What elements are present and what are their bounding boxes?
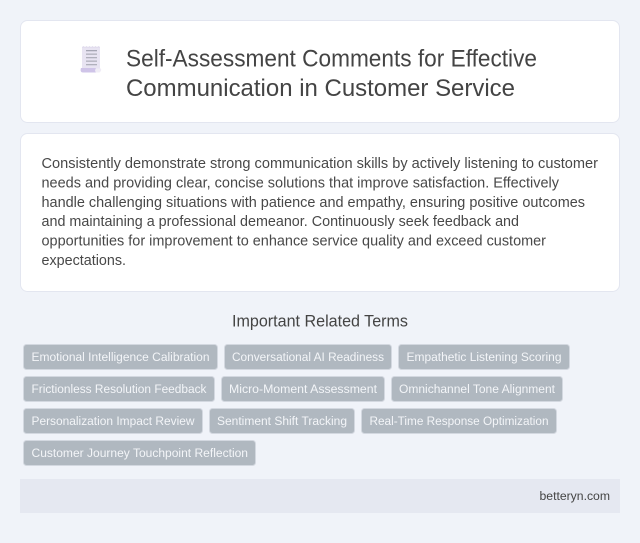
tag — [222, 376, 384, 402]
tag — [392, 376, 562, 402]
heading: related terms: Important Related Terms — [232, 312, 408, 330]
tag: Micro-Moment Assessment — [229, 382, 378, 396]
tag — [24, 344, 218, 370]
text block: self-assessment paragraph: opportunities for improvement to enhance service quality and exceed customer — [42, 234, 546, 250]
tag: Real-Time Response Optimization — [370, 414, 549, 428]
tag: Omnichannel Tone Alignment — [399, 382, 556, 396]
tag — [398, 344, 570, 370]
tag: Frictionless Resolution Feedback — [32, 382, 207, 396]
tag — [362, 408, 556, 434]
tag: Personalization Impact Review — [32, 414, 195, 428]
tag — [224, 344, 392, 370]
text block: self-assessment paragraph: and maintaining a professional demeanor. Continuously seek feedback and — [42, 214, 519, 230]
tag: Emotional Intelligence Calibration — [32, 350, 210, 364]
text block: self-assessment paragraph — [42, 156, 598, 269]
footer — [20, 479, 620, 513]
text block: self-assessment paragraph: Consistently demonstrate strong communication skills by actively listening to customer — [42, 156, 598, 172]
tag: Conversational AI Readiness — [232, 350, 384, 364]
footer source text: betteryn.com — [540, 489, 610, 503]
tag: Customer Journey Touchpoint Reflection — [32, 446, 248, 460]
text block: self-assessment paragraph: handle challenging situations with patience and empathy, ensuring positive outcomes — [42, 195, 585, 211]
tag: Sentiment Shift Tracking — [217, 414, 347, 428]
panel: summary text — [20, 134, 620, 292]
tag — [24, 376, 214, 402]
tag — [24, 440, 256, 466]
tag: Empathetic Listening Scoring — [406, 350, 562, 364]
panel: header — [20, 20, 620, 122]
text block: self-assessment paragraph: expectations. — [42, 253, 126, 269]
title — [126, 46, 537, 102]
tag list — [24, 344, 570, 466]
tag — [210, 408, 354, 434]
icon: document — [81, 46, 101, 72]
tag — [24, 408, 202, 434]
title: Self-Assessment Comments for Effective — [126, 46, 537, 72]
text block: self-assessment paragraph: needs and providing clear, concise solutions that improve satisfaction. Effectively — [42, 175, 560, 191]
title: Communication in Customer Service — [126, 75, 515, 102]
